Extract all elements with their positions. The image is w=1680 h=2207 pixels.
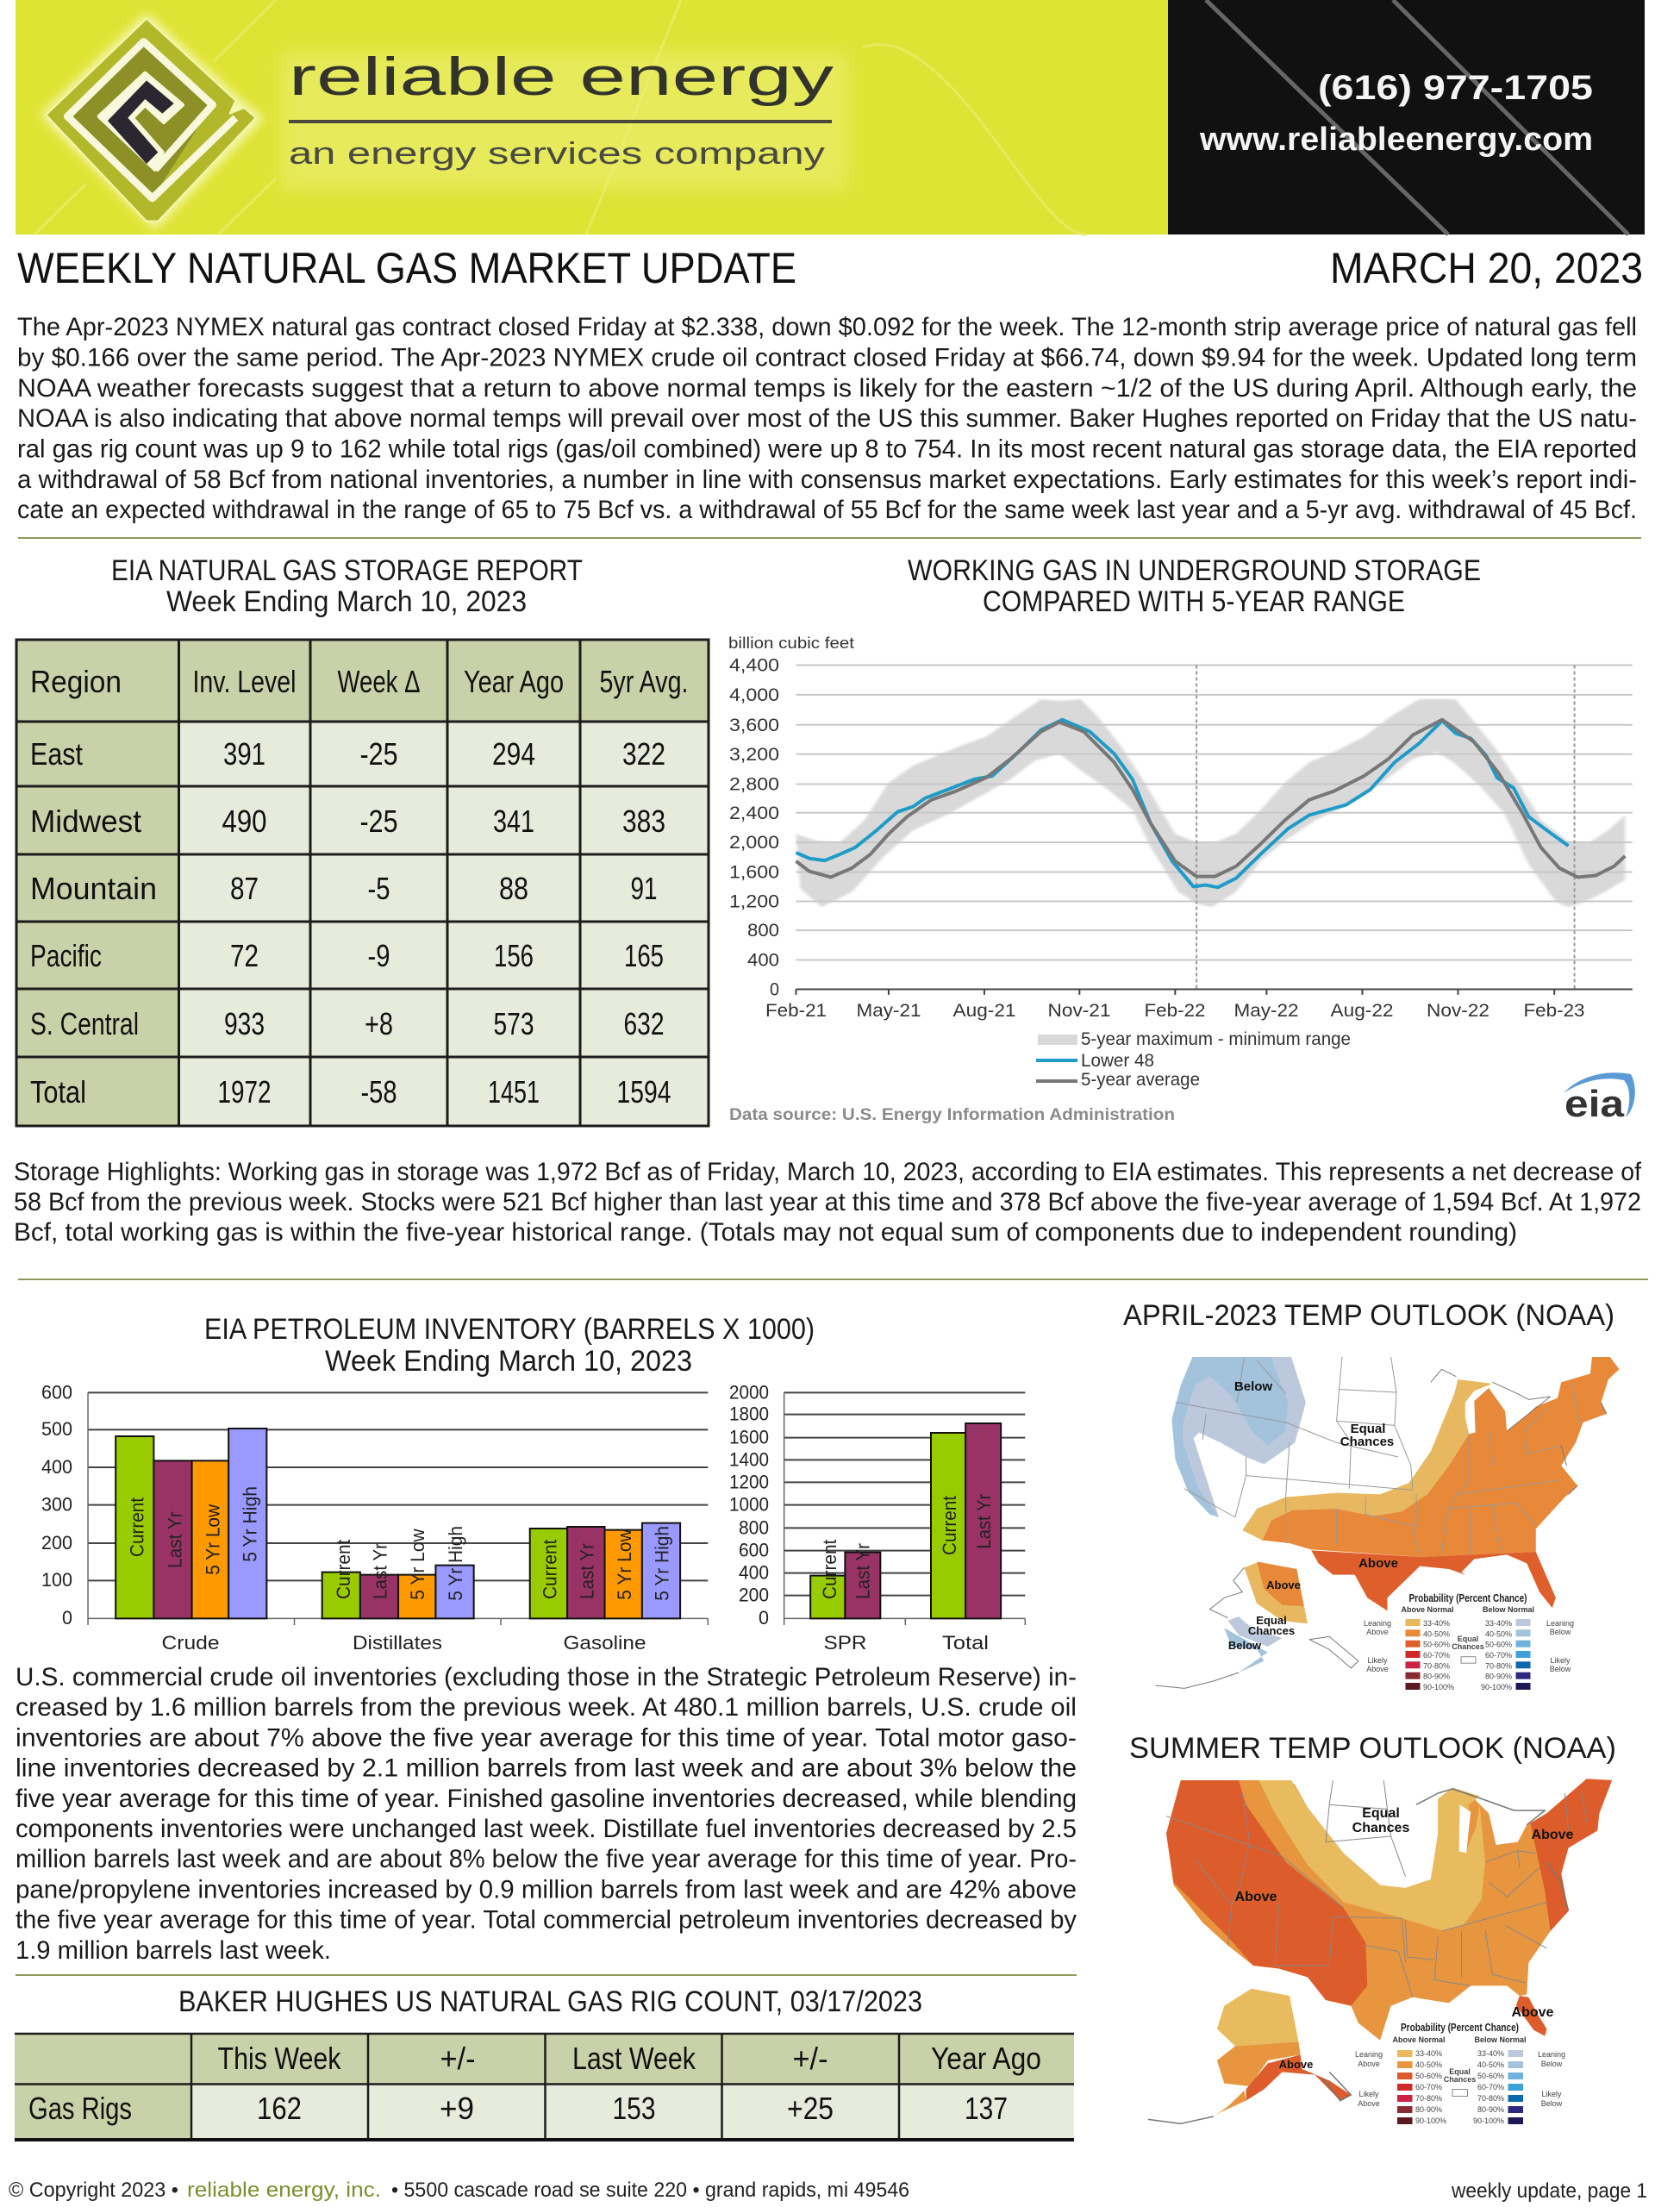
table row: Pacific: 72 xyxy=(230,938,259,973)
map legend: 70-80% xyxy=(1477,2094,1504,2103)
contact panel: (616) 977-1705 xyxy=(1318,69,1593,107)
chart legend: Lower 48 xyxy=(1081,1051,1154,1071)
table row: Midwest: Midwest xyxy=(30,803,141,839)
chart plot area xyxy=(796,666,1633,995)
rotated bar labels: 5 Yr Low xyxy=(614,1529,635,1600)
table row: Total: -58 xyxy=(360,1074,397,1110)
table header row: Region xyxy=(30,664,122,699)
table row: Midwest: 490 xyxy=(222,803,267,839)
footer xyxy=(9,2179,1647,2203)
title: MARCH 20, 2023 xyxy=(1330,244,1643,292)
x axis labels: May-22 xyxy=(1234,1001,1298,1021)
map legend: 40-50% xyxy=(1423,1629,1450,1638)
rotated bar labels xyxy=(126,1486,995,1601)
map legend: Above xyxy=(1366,1628,1389,1636)
map legend: 40-50% xyxy=(1477,2060,1504,2069)
right y axis labels: 400 xyxy=(739,1562,769,1584)
left y axis labels: 500 xyxy=(41,1418,72,1440)
rig table header xyxy=(217,2041,1041,2076)
map legend: Leaning xyxy=(1364,1619,1391,1628)
petroleum commentary paragraph: 1.9 million barrels last week. xyxy=(16,1936,331,1965)
map legend: Below xyxy=(1550,1628,1571,1636)
map legend xyxy=(1355,2021,1565,2125)
category labels: Gasoline xyxy=(564,1632,646,1654)
table row: East: 391 xyxy=(223,736,265,772)
table header row xyxy=(30,664,688,699)
storage highlights text: 58 Bcf from the previous week. Stocks were 521 Bcf higher than last year at this time and 378 Bcf above the five-year average of 1,594 Bcf. At 1,972 xyxy=(14,1188,1641,1216)
storage highlights text: Bcf, total working gas is within the five-year historical range. (Totals may not equal sum of components due to independent rounding) xyxy=(14,1218,1517,1247)
petroleum commentary paragraph: the five year average for this time of year. Total commercial petroleum inventories decreased by xyxy=(16,1906,1077,1935)
table row: Total: 1594 xyxy=(617,1074,671,1110)
x axis labels: Nov-22 xyxy=(1427,1001,1490,1021)
market summary paragraph: ral gas rig count was up 9 to 162 while total rigs (gas/oil combined) were up 8 to 754. In its most recent natural gas storage data, the EIA reported xyxy=(17,435,1637,464)
heading: petroleum inventory xyxy=(204,1313,815,1378)
table row: East: 322 xyxy=(622,736,665,772)
left y axis labels: 300 xyxy=(41,1494,72,1516)
footer: weekly update, page 1 xyxy=(1451,2179,1647,2203)
right y axis labels: 1000 xyxy=(729,1494,769,1516)
table row: S. Central: 632 xyxy=(624,1006,664,1041)
left y axis labels: 400 xyxy=(41,1456,72,1478)
footer: reliable energy, inc. xyxy=(187,2179,381,2202)
category labels: Total xyxy=(942,1632,989,1654)
map legend: 50-60% xyxy=(1485,1641,1512,1649)
map legend: 50-60% xyxy=(1415,2072,1442,2080)
chart bars and axes xyxy=(88,1392,1025,1625)
table header row: Week Δ xyxy=(338,664,421,699)
table row: Midwest: 383 xyxy=(622,803,665,839)
map legend: 40-50% xyxy=(1415,2060,1442,2069)
y axis labels: 2,000 xyxy=(729,833,779,853)
map labels: Above xyxy=(1358,1556,1398,1571)
rotated bar labels: 5 Yr High xyxy=(445,1526,466,1601)
map legend: Below xyxy=(1550,1665,1571,1673)
map legend: 60-70% xyxy=(1415,2083,1442,2091)
table row: East: 294 xyxy=(492,736,535,772)
map legend: 80-90% xyxy=(1477,2105,1504,2114)
market summary paragraph xyxy=(17,313,1637,524)
left y axis labels: 600 xyxy=(41,1381,72,1403)
category labels: Crude xyxy=(162,1632,219,1654)
y axis labels: 3,600 xyxy=(729,716,779,735)
rig table header: +/- xyxy=(440,2041,476,2076)
icon: eia logo: eia xyxy=(1564,1083,1625,1125)
map: April temperature outlook xyxy=(1155,1357,1619,1691)
rig count table xyxy=(15,2033,1074,2141)
map labels: Chances xyxy=(1352,1821,1409,1835)
rotated bar labels: Current xyxy=(819,1540,840,1599)
category labels: Distillates xyxy=(353,1632,442,1654)
map legend: Above xyxy=(1366,1665,1389,1673)
x axis labels: Aug-21 xyxy=(953,1001,1015,1021)
map labels: Chances xyxy=(1248,1624,1295,1637)
map legend: 60-70% xyxy=(1485,1651,1512,1660)
y axis labels: 0 xyxy=(770,979,779,1000)
bar chart: petroleum inventory xyxy=(41,1381,1025,1654)
table row: Mountain xyxy=(30,871,657,906)
right y axis labels: 600 xyxy=(739,1540,769,1561)
table row: Pacific xyxy=(30,938,664,973)
map legend: 33-40% xyxy=(1477,2049,1504,2058)
x axis labels: May-21 xyxy=(857,1001,921,1021)
map legend: 90-100% xyxy=(1481,1683,1512,1691)
heading: working gas chart xyxy=(908,554,1481,618)
table row: Total: Total xyxy=(30,1074,86,1110)
table row: East: East xyxy=(30,736,83,772)
map legend: 70-80% xyxy=(1423,1661,1450,1670)
rotated bar labels: Last Yr xyxy=(577,1543,598,1599)
map legend: Below xyxy=(1541,2099,1563,2108)
map legend: 50-60% xyxy=(1477,2072,1504,2080)
map legend: Equal xyxy=(1449,2067,1471,2076)
chart legend: 5-year maximum - minimum range xyxy=(1081,1029,1351,1049)
petroleum commentary paragraph: pane/propylene inventories increased by 0.9 million barrels from last week and are 42% above xyxy=(16,1875,1077,1904)
map labels: Equal xyxy=(1351,1422,1385,1436)
map labels: Below xyxy=(1228,1639,1262,1652)
market summary paragraph: NOAA weather forecasts suggest that a return to above normal temps is likely for the eastern ~1/2 of the US during April. Although early, the xyxy=(17,374,1637,403)
table row: Midwest: 341 xyxy=(493,803,534,839)
heading: rig count: BAKER HUGHES US NATURAL GAS RIG COUNT, 03/17/2023 xyxy=(178,1985,922,2018)
table row: East xyxy=(30,736,665,772)
map legend: 80-90% xyxy=(1485,1672,1512,1681)
table row: S. Central: 933 xyxy=(224,1006,265,1041)
five-year range band xyxy=(796,699,1625,907)
company name: reliable energy xyxy=(289,47,834,107)
right y axis labels: 1600 xyxy=(729,1427,769,1448)
map legend: Above Normal xyxy=(1401,1605,1454,1614)
table row: Midwest: -25 xyxy=(360,803,398,839)
table row: Mountain: 91 xyxy=(631,871,657,906)
heading: storage report: Week Ending March 10, 2023 xyxy=(166,585,527,618)
rotated bar labels: Last Yr xyxy=(369,1543,390,1599)
left y axis labels xyxy=(41,1381,72,1629)
contact panel xyxy=(1168,0,1645,234)
map shapes xyxy=(1155,1357,1619,1688)
petroleum commentary paragraph: million barrels last week and are about 8% below the five year average for this time of year. Pro- xyxy=(16,1845,1077,1873)
heading: storage report xyxy=(111,554,583,618)
rotated bar labels: Current xyxy=(539,1540,560,1599)
chart legend: 5-year average xyxy=(1081,1070,1200,1090)
table row: Mountain: Mountain xyxy=(30,871,157,906)
table row: S. Central: +8 xyxy=(365,1006,393,1041)
table row: East: -25 xyxy=(360,736,398,772)
table row: Pacific: 156 xyxy=(494,938,534,973)
heading: working gas chart: WORKING GAS IN UNDERGROUND STORAGE xyxy=(908,554,1481,587)
table row: Pacific: Pacific xyxy=(30,938,102,973)
rig table values: 162 xyxy=(257,2091,302,2126)
storage highlights text xyxy=(14,1158,1642,1247)
petroleum commentary paragraph: line inventories decreased by 2.1 million barrels from last week and are about 3% below the xyxy=(16,1754,1077,1783)
footer: • 5500 cascade road se suite 220 • grand rapids, mi 49546 xyxy=(391,2179,909,2202)
market summary paragraph: The Apr-2023 NYMEX natural gas contract closed Friday at $2.338, down $0.092 for the week. The 12-month strip average price of natural gas fell xyxy=(17,313,1637,341)
market summary paragraph: a withdrawal of 58 Bcf from national inventories, a number in line with consensus market expectations. Early estimates for this week’s report indi- xyxy=(17,466,1637,494)
heading: summer outlook: SUMMER TEMP OUTLOOK (NOAA) xyxy=(1129,1732,1616,1765)
market summary paragraph: cate an expected withdrawal in the range of 65 to 75 Bcf vs. a withdrawal of 55 Bcf for the same week last year and a 5-yr avg. withdrawal of 45 Bcf. xyxy=(17,496,1637,524)
left y axis labels: 100 xyxy=(41,1569,72,1591)
left y axis labels: 0 xyxy=(62,1607,72,1629)
table row: Pacific: 165 xyxy=(624,938,664,973)
category labels xyxy=(162,1632,989,1654)
map labels: Above xyxy=(1235,1890,1277,1904)
left y axis labels: 200 xyxy=(41,1532,72,1554)
heading: storage report: EIA NATURAL GAS STORAGE REPORT xyxy=(111,554,583,587)
map labels: Below xyxy=(1234,1379,1272,1394)
map labels xyxy=(1228,1379,1398,1652)
category labels: SPR xyxy=(824,1632,867,1654)
heading: petroleum inventory: EIA PETROLEUM INVENTORY (BARRELS X 1000) xyxy=(204,1313,815,1346)
table row: Total: 1451 xyxy=(488,1074,540,1110)
rig table values: +25 xyxy=(787,2091,834,2126)
map legend: Likely xyxy=(1367,1656,1388,1665)
map legend: 90-100% xyxy=(1423,1683,1454,1691)
right y axis labels: 1400 xyxy=(729,1448,769,1470)
table row: Midwest xyxy=(30,803,665,839)
rotated bar labels: 5 Yr Low xyxy=(407,1529,428,1600)
map labels xyxy=(1235,1806,1574,2071)
right y axis labels xyxy=(729,1381,769,1629)
map legend: 33-40% xyxy=(1423,1619,1450,1628)
map legend: Chances xyxy=(1444,2075,1476,2084)
market summary paragraph: NOAA is also indicating that above normal temps will prevail over most of the US this summer. Baker Hughes reported on Friday that the US natu- xyxy=(17,404,1637,433)
y axis labels: 3,200 xyxy=(729,745,779,765)
petroleum commentary paragraph: five year average for this time of year. Finished gasoline inventories decreased, while blending xyxy=(16,1785,1077,1813)
right y axis labels: 0 xyxy=(759,1607,769,1629)
heading: April outlook: APRIL-2023 TEMP OUTLOOK (NOAA) xyxy=(1123,1299,1614,1332)
map legend: Probability (Percent Chance) xyxy=(1401,2021,1519,2034)
rotated bar labels: Last Yr xyxy=(973,1494,995,1549)
title xyxy=(17,244,1643,292)
table row: Total: 1972 xyxy=(217,1074,271,1110)
map legend: Below Normal xyxy=(1483,1605,1534,1614)
map legend: 40-50% xyxy=(1485,1629,1512,1638)
map legend: Below Normal xyxy=(1474,2035,1527,2044)
table header row: Year Ago xyxy=(464,664,564,699)
rotated bar labels: Current xyxy=(126,1497,147,1557)
map legend: 80-90% xyxy=(1415,2105,1442,2114)
logo diamond xyxy=(41,13,265,230)
y axis labels: 800 xyxy=(747,921,779,941)
map legend: 60-70% xyxy=(1423,1651,1450,1660)
market summary paragraph: by $0.166 over the same period. The Apr-2023 NYMEX crude oil contract closed Friday at $66.74, down $9.94 for the week. Updated long term xyxy=(17,343,1637,372)
rig table values: 153 xyxy=(612,2091,655,2126)
rig table values: Gas Rigs xyxy=(28,2091,132,2126)
map legend: Chances xyxy=(1452,1642,1484,1651)
title: WEEKLY NATURAL GAS MARKET UPDATE xyxy=(17,244,796,292)
data source note: Data source: U.S. Energy Information Administration xyxy=(729,1106,1175,1124)
heading: petroleum inventory: Week Ending March 10, 2023 xyxy=(325,1345,692,1378)
table header row: 5yr Avg. xyxy=(600,664,688,699)
map legend: 60-70% xyxy=(1477,2083,1504,2091)
map legend: Likely xyxy=(1541,2090,1562,2098)
icon: eia logo xyxy=(1564,1072,1635,1125)
map legend: Below xyxy=(1541,2060,1563,2068)
rotated bar labels: Current xyxy=(333,1540,354,1599)
map legend: 90-100% xyxy=(1473,2116,1504,2125)
map labels: Above xyxy=(1266,1579,1301,1591)
lower 48 line xyxy=(796,720,1568,887)
map legend: 70-80% xyxy=(1415,2094,1442,2103)
x axis labels: Aug-22 xyxy=(1331,1001,1393,1021)
map legend: 90-100% xyxy=(1415,2116,1446,2125)
y axis labels: 4,400 xyxy=(729,655,779,676)
map legend: Equal xyxy=(1458,1635,1478,1643)
map legend: 80-90% xyxy=(1423,1672,1450,1681)
tagline: an energy services company xyxy=(289,135,825,171)
map legend: Leaning xyxy=(1538,2050,1565,2059)
right y axis labels: 200 xyxy=(739,1585,769,1606)
y axis labels: 2,400 xyxy=(729,803,779,823)
right y axis labels: 1200 xyxy=(729,1471,769,1492)
right y axis labels: 1800 xyxy=(729,1404,769,1425)
map labels: Above xyxy=(1532,1828,1574,1842)
map legend: Likely xyxy=(1550,1656,1571,1665)
rig table values xyxy=(28,2091,1008,2126)
rotated bar labels: 5 Yr Low xyxy=(203,1504,224,1575)
table row: Mountain: -5 xyxy=(367,871,390,906)
map shapes xyxy=(1148,1779,1612,2123)
rig table values: 137 xyxy=(965,2091,1008,2126)
line chart: working gas in storage xyxy=(728,635,1635,1125)
map legend: Leaning xyxy=(1355,2050,1383,2059)
right y axis labels: 800 xyxy=(739,1516,769,1538)
petroleum commentary paragraph: creased by 1.6 million barrels from the previous week. At 480.1 million barrels, U.S. crude oil xyxy=(16,1693,1077,1722)
table row: Mountain: 88 xyxy=(499,871,528,906)
rotated bar labels: Last Yr xyxy=(852,1543,874,1599)
right y axis labels: 2000 xyxy=(729,1381,769,1403)
rig table values: +9 xyxy=(440,2091,474,2126)
petroleum commentary paragraph: U.S. commercial crude oil inventories (excluding those in the Strategic Petroleum Reserve) in- xyxy=(16,1663,1077,1691)
rotated bar labels: Current xyxy=(939,1496,960,1555)
contact panel: www.reliableenergy.com xyxy=(1199,122,1593,158)
map legend: Above xyxy=(1358,2099,1380,2108)
header banner xyxy=(16,0,1645,234)
five-year average line xyxy=(796,720,1625,877)
table row: Mountain: 87 xyxy=(230,871,259,906)
table row: S. Central xyxy=(30,1006,664,1041)
x axis labels: Feb-21 xyxy=(765,1001,827,1021)
rotated bar labels: 5 Yr High xyxy=(652,1526,672,1601)
table header row: Inv. Level xyxy=(193,664,297,699)
table row: S. Central: S. Central xyxy=(30,1006,139,1041)
y axis labels: 400 xyxy=(747,950,779,971)
rig table header: This Week xyxy=(217,2041,341,2076)
storage table xyxy=(16,640,709,1126)
footer: © Copyright 2023 • xyxy=(9,2179,178,2202)
map legend: 50-60% xyxy=(1423,1641,1450,1649)
map legend: Leaning xyxy=(1546,1619,1574,1628)
x axis labels: Nov-21 xyxy=(1048,1001,1110,1021)
map labels: Equal xyxy=(1256,1614,1287,1627)
rig table header: Year Ago xyxy=(931,2041,1041,2076)
rig table header: Last Week xyxy=(572,2041,696,2076)
chart legend xyxy=(1036,1029,1351,1090)
table row: Pacific: -9 xyxy=(367,938,390,973)
x axis labels: Feb-22 xyxy=(1145,1001,1205,1021)
petroleum commentary paragraph: components inventories were unchanged last week. Distillate fuel inventories decreased by 2.5 xyxy=(16,1815,1077,1843)
storage highlights text: Storage Highlights: Working gas in storage was 1,972 Bcf as of Friday, March 10, 2023, according to EIA estimates. This represents a net decrease of xyxy=(14,1158,1642,1186)
map legend: 33-40% xyxy=(1485,1619,1512,1628)
map labels: Above xyxy=(1279,2058,1313,2071)
y axis labels: 1,600 xyxy=(729,862,779,883)
table row: S. Central: 573 xyxy=(493,1006,534,1041)
map legend: Above xyxy=(1358,2060,1380,2068)
y axis labels xyxy=(729,655,779,1000)
petroleum commentary paragraph: inventories are about 7% above the five year average for this time of year. Total motor gaso- xyxy=(16,1723,1077,1752)
rotated bar labels: Last Yr xyxy=(164,1511,186,1568)
map legend: Probability (Percent Chance) xyxy=(1408,1591,1527,1604)
map legend xyxy=(1364,1591,1574,1691)
map legend: 70-80% xyxy=(1485,1661,1512,1670)
map legend: Above Normal xyxy=(1392,2035,1446,2044)
map legend: Likely xyxy=(1358,2090,1379,2098)
map labels: Above xyxy=(1512,2005,1554,2020)
x axis labels xyxy=(765,1001,1584,1021)
y axis labels: 1,200 xyxy=(729,891,779,912)
map: summer temperature outlook xyxy=(1148,1779,1612,2125)
rotated bar labels: 5 Yr High xyxy=(239,1486,260,1562)
heading: working gas chart: COMPARED WITH 5-YEAR RANGE xyxy=(983,585,1405,618)
x axis labels: Feb-23 xyxy=(1524,1001,1584,1021)
petroleum commentary paragraph xyxy=(16,1663,1077,1965)
y axis labels: 4,000 xyxy=(729,685,779,705)
y axis unit: billion cubic feet xyxy=(728,635,854,652)
map legend: 33-40% xyxy=(1415,2049,1442,2058)
y axis labels: 2,800 xyxy=(729,774,779,795)
table row: Total xyxy=(30,1074,671,1110)
rig table header: +/- xyxy=(793,2041,828,2076)
map labels: Chances xyxy=(1340,1435,1394,1449)
map labels: Equal xyxy=(1362,1806,1400,1821)
